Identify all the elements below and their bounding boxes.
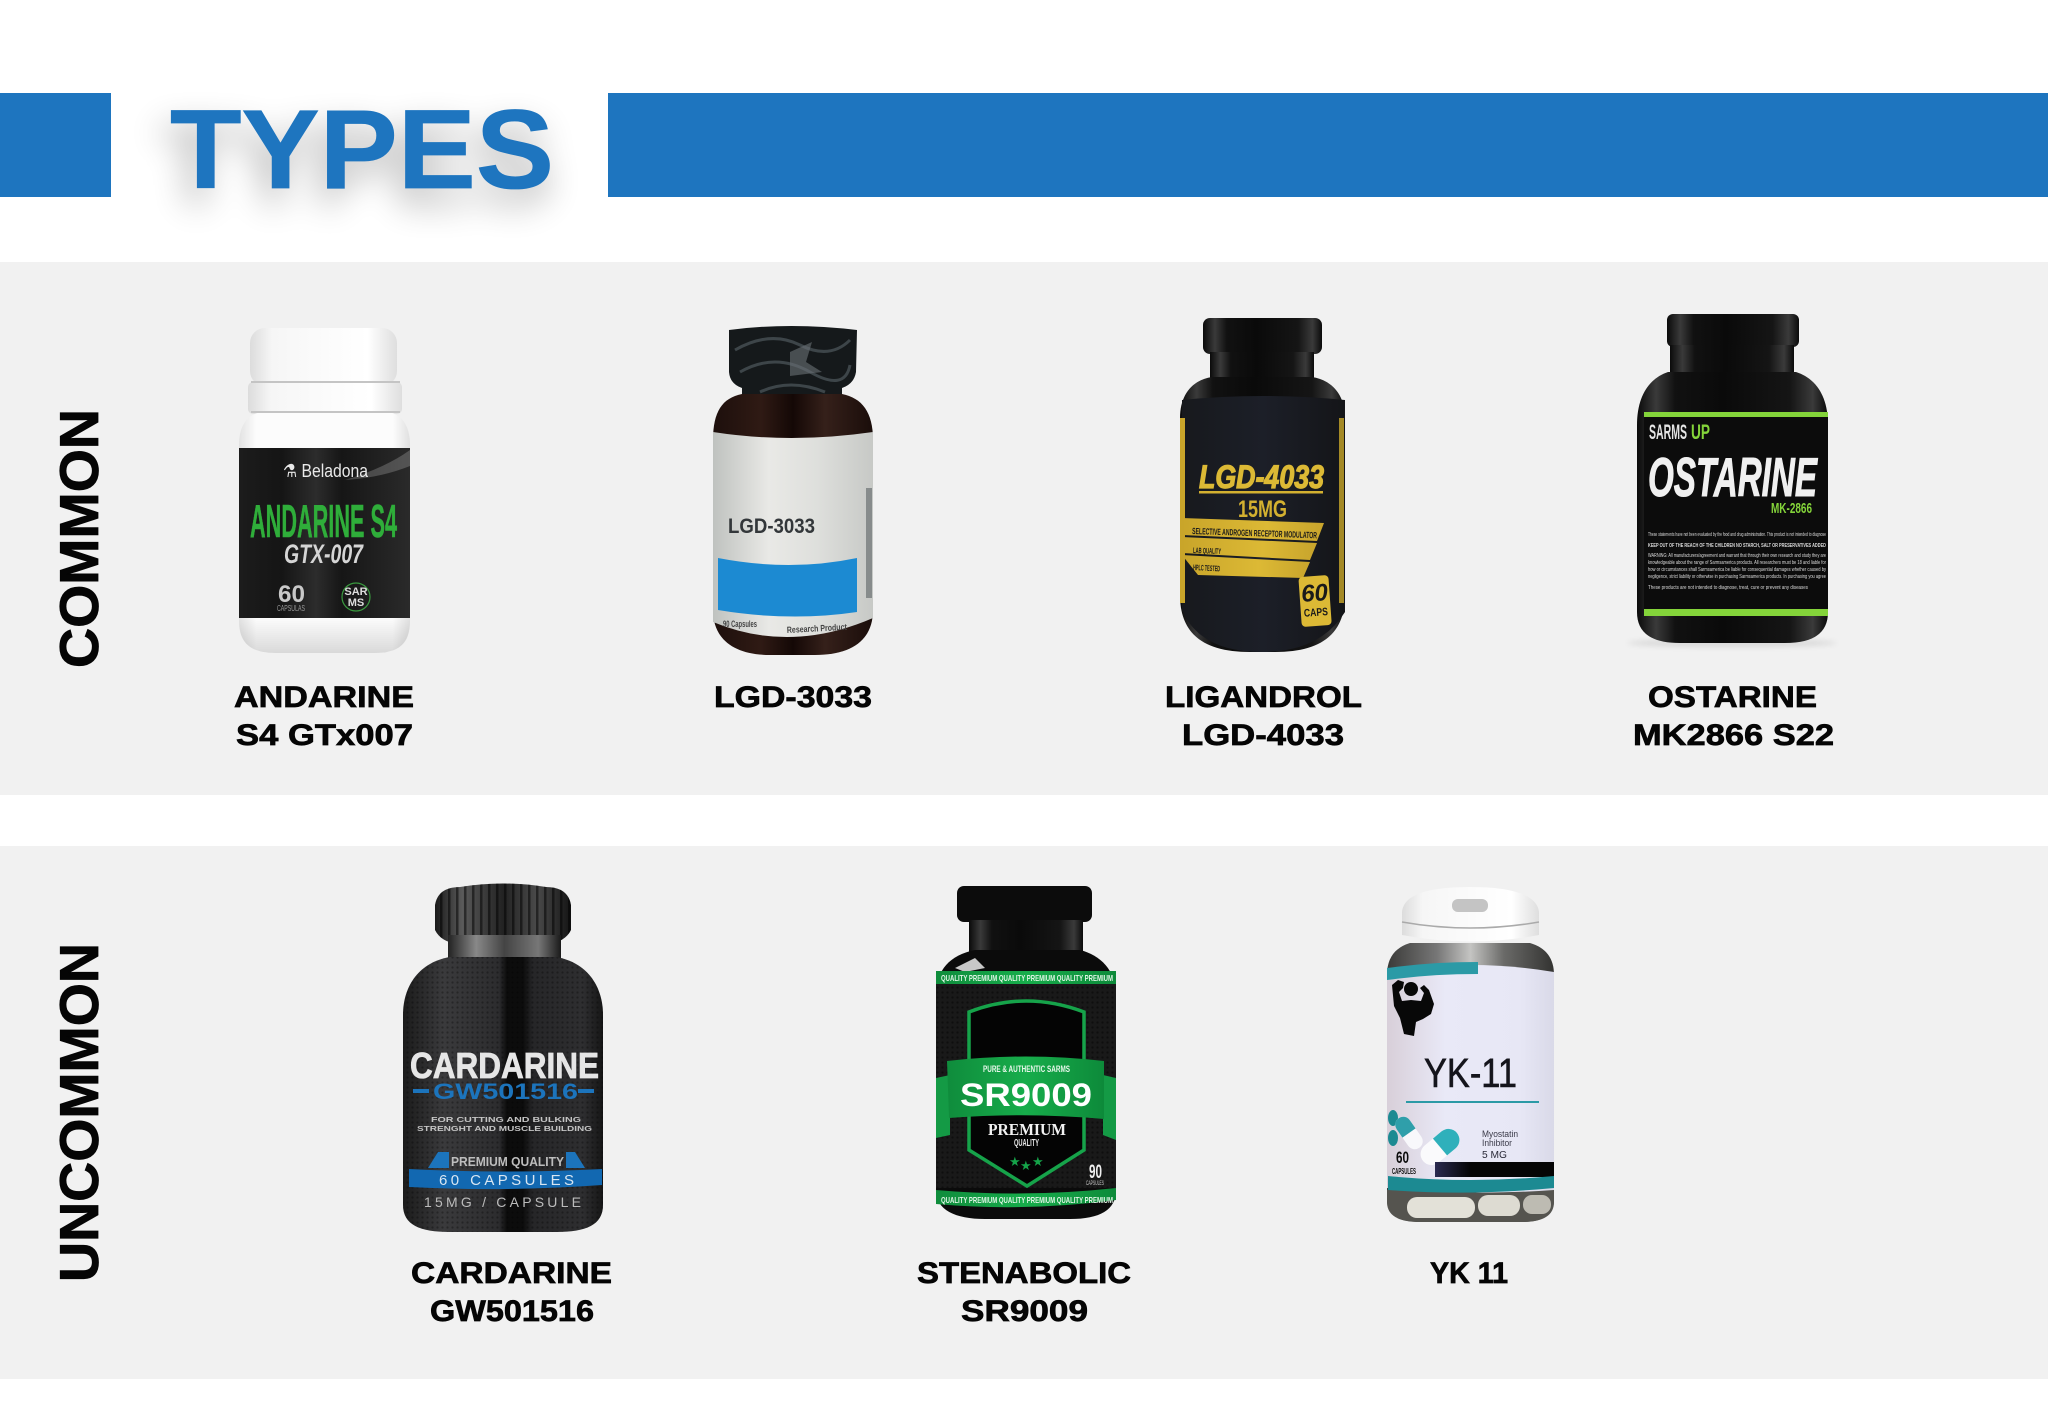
icon: muscle man [1392,980,1434,1036]
bottle: lgd-3033 [713,326,873,655]
bottle: ostarine: These products are not intended to diagnose, treat, cure or prevent any diseases [1648,585,1808,591]
title shadow: TYPES [160,103,552,228]
label: lgd-3033: LGD-3033 [714,681,872,714]
bottle: yk-11: Inhibitor [1482,1138,1512,1148]
bottle: yk-11: 60 [1396,1148,1409,1167]
label: ligandrol: LGD-4033 [1182,719,1344,752]
label: stenabolic: SR9009 [961,1295,1088,1328]
bottle: ostarine: UP [1691,421,1710,444]
bottle: andarine: SAR [344,586,368,598]
bottle: ligandrol: CAPS [1304,606,1328,620]
bottle: stenabolic: PREMIUM [988,1120,1066,1139]
label: ligandrol [1165,681,1362,752]
label: cardarine: CARDARINE [411,1257,612,1290]
bottle: cardarine: 15MG / CAPSULE [424,1194,581,1210]
label: ostarine [1633,681,1834,752]
bottle: ostarine: negligence, strict liability or otherwise in purchasing Sarmsamerica products. In purchasing you agree [1648,574,1826,580]
header band: left block [0,93,111,197]
bottle: andarine: MS [348,597,364,609]
bottle: andarine: ⚗ Beladona [283,461,369,481]
bottle: cardarine: CARDARINE [410,1045,599,1086]
bottle: ligandrol [1180,318,1345,652]
bottle: ostarine: knowledgeable about the range of Sarmsamerica products. All researchers must be 18 and liable for [1648,560,1826,566]
bottle: yk-11: YK-11 [1424,1050,1517,1096]
bottle: ligandrol: 60 [1300,579,1329,608]
bottle: yk-11: CAPSULES [1392,1167,1416,1176]
label: ostarine: OSTARINE [1648,681,1817,714]
bottle: andarine: GTX-007 [284,539,364,569]
bottle: cardarine: STRENGHT AND MUSCLE BUILDING [417,1124,592,1133]
bottle: ostarine: KEEP OUT OF THE REACH OF THE CHILDREN NO STARCH, SALT OR PRESERVATIVES ADDED [1648,543,1826,549]
label: cardarine [411,1257,612,1328]
bottle: cardarine: GW501516 [433,1079,578,1104]
side heading: common: COMMON [48,409,110,668]
bottle: lgd-3033: LGD-3033 [728,515,815,538]
bottle: andarine: CAPSULAS [277,604,305,613]
label: stenabolic: STENABOLIC [917,1257,1131,1290]
bottle: cardarine: FOR CUTTING AND BULKING [431,1115,581,1124]
label: andarine: S4 GTx007 [236,719,413,752]
label: ostarine: MK2866 S22 [1633,719,1834,752]
label: andarine: ANDARINE [234,681,414,714]
bottle: stenabolic: SR9009 [960,1077,1092,1113]
bottle: ligandrol: HPLC TESTED [1193,563,1220,573]
bottle: andarine [239,328,410,653]
bottle: stenabolic: CAPSULES [1086,1181,1104,1187]
label: ligandrol: LIGANDROL [1165,681,1362,714]
bottle: stenabolic: ★ [1020,1158,1032,1173]
bottle: ligandrol: SELECTIVE ANDROGEN RECEPTOR MODULATOR [1192,526,1317,540]
bottle: andarine: ANDARINE S4 [250,495,397,547]
label: stenabolic [917,1257,1131,1328]
bottle: ostarine: WARNING: All manufacturers/agreement and warrant that through their own research and study they are [1648,553,1826,559]
label: yk-11: YK 11 [1430,1257,1508,1290]
bottle: andarine: 60 [278,581,305,608]
bottle: stenabolic: ★ [1009,1154,1021,1169]
bottle: stenabolic: ★ [1032,1154,1044,1169]
bottle: ligandrol: LAB QUALITY [1193,546,1222,556]
bottle: stenabolic: QUALITY [1014,1138,1039,1149]
bottle: stenabolic [936,886,1116,1219]
panel: uncommon [0,846,2048,1379]
bottle: stenabolic: PURE & AUTHENTIC SARMS [983,1064,1070,1074]
bottle: lgd-3033: Research Product [787,622,847,635]
bottle: cardarine: PREMIUM QUALITY [451,1154,564,1169]
label: cardarine: GW501516 [430,1295,594,1328]
bottle: cardarine: 60 CAPSULES [439,1172,574,1189]
bottle: ostarine: how or circumstances shall Sarmsamerica be liable for consequential damages whether caused by [1648,567,1826,573]
label: andarine [234,681,414,752]
bottle: ligandrol: LGD-4033 [1199,459,1324,495]
bottle: ostarine: MK-2866 [1771,500,1812,517]
bottle: cardarine [403,884,603,1232]
bottle: yk-11 [1387,887,1554,1222]
bottle: yk-11: Myostatin [1482,1129,1518,1139]
bottle: ostarine: OSTARINE [1648,446,1818,508]
bottle: lgd-3033: 90 Capsules [723,619,757,629]
bottle: stenabolic: QUALITY PREMIUM QUALITY PREMIUM QUALITY PREMIUM [941,1195,1113,1205]
title: TYPES [170,87,554,212]
side heading: uncommon: UNCOMMON [48,943,110,1282]
bottle: ligandrol: 15MG [1238,496,1287,523]
bottle: ostarine: These statements have not been evaluated by the food and drug administration. This product is not intended to diagnose [1648,532,1826,538]
bottle: ostarine: SARMS [1649,421,1687,444]
bottle: stenabolic: QUALITY PREMIUM QUALITY PREMIUM QUALITY PREMIUM [941,973,1113,983]
bottle: stenabolic: 90 [1089,1162,1102,1183]
panel: common [0,262,2048,795]
header band: right block [608,93,2048,197]
bottle: ostarine [1627,314,1837,647]
bottle: yk-11: 5 MG [1482,1150,1507,1161]
